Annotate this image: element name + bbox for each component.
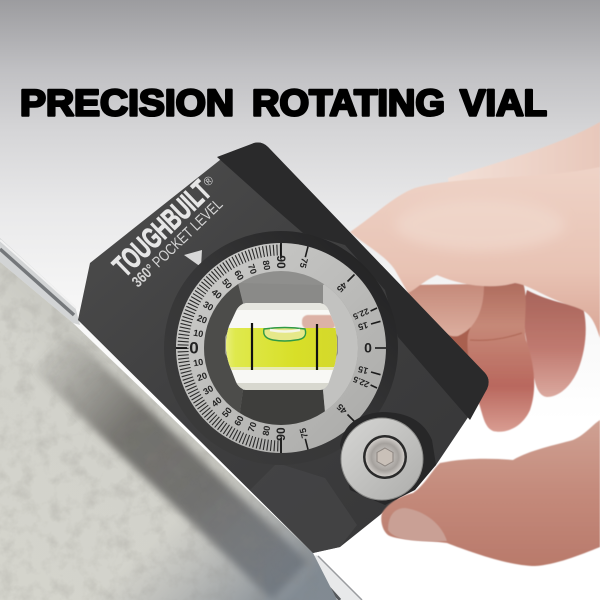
thumb wheel xyxy=(340,412,436,505)
right scale ticks xyxy=(305,247,386,449)
left scale numbers: 90 xyxy=(274,255,288,269)
thumb xyxy=(381,420,600,566)
lower highlight facet xyxy=(250,463,357,553)
back finger xyxy=(448,122,600,200)
fine tick marks xyxy=(183,250,281,446)
back of hand and index finger xyxy=(350,167,600,338)
bolt recess xyxy=(363,435,407,479)
left scale numbers: 50 xyxy=(220,405,234,419)
vial right line xyxy=(316,324,318,370)
middle finger xyxy=(405,284,484,336)
scale ring xyxy=(176,243,386,453)
registered mark: ® xyxy=(200,173,217,189)
right scale numbers: 45 xyxy=(335,280,349,294)
right scale numbers: 15 xyxy=(357,364,369,376)
thumbnail xyxy=(388,508,447,541)
right scale numbers: 75 xyxy=(298,257,310,269)
left scale numbers: 50 xyxy=(220,277,234,291)
vial left line xyxy=(251,323,253,370)
level body xyxy=(78,142,489,553)
left scale numbers: 10 xyxy=(192,357,204,368)
title: PRECISION xyxy=(20,82,234,124)
ring finger crease xyxy=(470,333,522,340)
left scale numbers xyxy=(189,255,288,441)
wheel rim xyxy=(341,418,423,500)
icon: pointer triangle xyxy=(184,250,202,267)
title xyxy=(20,82,547,124)
hand behind the level xyxy=(350,122,600,432)
left scale numbers: 80 xyxy=(261,259,272,271)
bubble xyxy=(264,328,306,341)
right scale numbers: 22.5 xyxy=(351,306,371,322)
metal stud surface xyxy=(0,240,340,600)
right scale numbers: 75 xyxy=(298,427,310,439)
left scale numbers: 10 xyxy=(192,328,204,339)
left scale numbers: 30 xyxy=(201,299,215,313)
left scale numbers: 90 xyxy=(274,427,288,441)
vial window xyxy=(204,271,358,425)
right scale numbers xyxy=(298,257,372,439)
yellow liquid xyxy=(226,328,337,367)
left scale numbers: 20 xyxy=(196,370,208,383)
bubble highlight xyxy=(270,330,300,332)
left scale numbers: 60 xyxy=(232,414,246,428)
left scale numbers: 0 xyxy=(189,338,199,358)
end tick marks xyxy=(176,243,281,453)
brand name: TOUGHBUILT xyxy=(107,175,218,283)
left scale numbers: 70 xyxy=(246,421,259,433)
wheel surround xyxy=(340,412,436,505)
body outline xyxy=(78,142,489,553)
left scale numbers: 60 xyxy=(232,268,246,282)
left scale numbers: 40 xyxy=(210,287,224,301)
dial bezel xyxy=(164,231,398,465)
hex bolt head xyxy=(377,448,393,466)
product name: 360° POCKET LEVEL xyxy=(129,196,227,291)
right scale numbers: 22.5 xyxy=(351,374,371,390)
right scale numbers: 0 xyxy=(364,340,372,356)
right scale numbers: 45 xyxy=(335,402,349,416)
left scale numbers: 30 xyxy=(201,383,215,397)
ring finger xyxy=(467,280,534,432)
left scale numbers: 70 xyxy=(246,263,259,275)
top dark facet xyxy=(217,142,489,420)
left scale numbers: 20 xyxy=(196,313,208,326)
title: ROTATING xyxy=(252,82,445,124)
metal stud edge strip xyxy=(0,238,362,600)
finger gap shade xyxy=(440,325,480,365)
title: VIAL xyxy=(460,82,547,124)
left scale numbers: 80 xyxy=(261,425,272,437)
index finger highlight xyxy=(395,199,565,251)
vial tube xyxy=(226,303,337,390)
dial xyxy=(164,231,398,465)
left scale numbers: 40 xyxy=(210,395,224,409)
little finger xyxy=(524,290,586,397)
right scale numbers: 15 xyxy=(357,320,369,332)
bolt washer xyxy=(366,438,404,476)
